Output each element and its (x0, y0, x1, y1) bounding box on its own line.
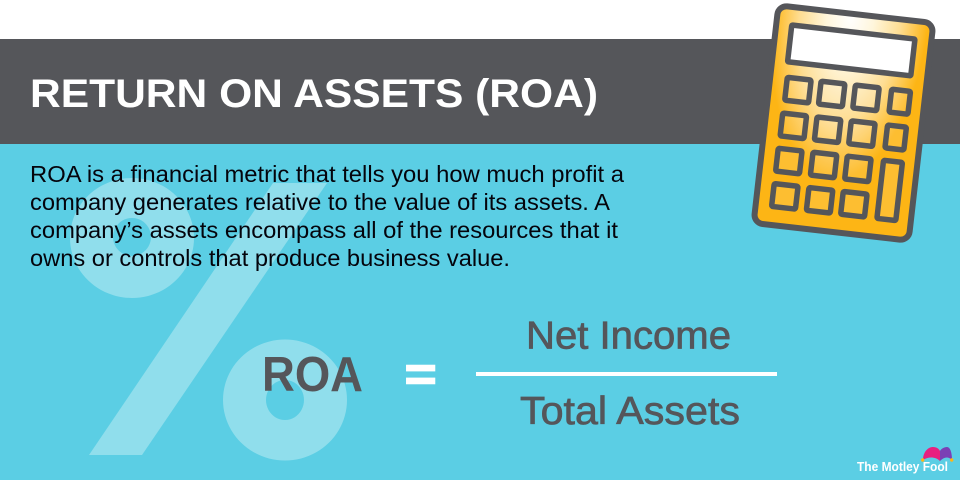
formula: numerator: Net Income (526, 314, 731, 358)
icon: jester hat (921, 447, 953, 462)
text block: ROA definition: company generates relative to the value of its assets. A (30, 189, 610, 215)
text block: ROA definition: owns or controls that produce business value. (30, 245, 510, 271)
icon: background percent sign (70, 178, 347, 460)
calculator buttons (772, 77, 911, 221)
formula: equals sign: = (405, 347, 437, 400)
calculator screen (788, 25, 915, 76)
formula: denominator: Total Assets (520, 390, 740, 433)
logo: The Motley Fool (857, 447, 953, 474)
formula: ROA label: ROA (262, 348, 363, 402)
text block: ROA definition: ROA is a financial metric that tells you how much profit a (30, 161, 625, 187)
panel: teal background (0, 144, 960, 480)
formula: fraction bar (476, 372, 777, 376)
title: RETURN ON ASSETS (ROA) (30, 72, 598, 116)
text block: ROA definition: company’s assets encompass all of the resources that it (30, 217, 618, 243)
text block: ROA definition (30, 161, 625, 271)
calculator body (754, 5, 933, 241)
logo wordmark: The Motley Fool (857, 459, 948, 474)
icon: calculator (754, 5, 933, 241)
panel: title band (0, 39, 960, 144)
